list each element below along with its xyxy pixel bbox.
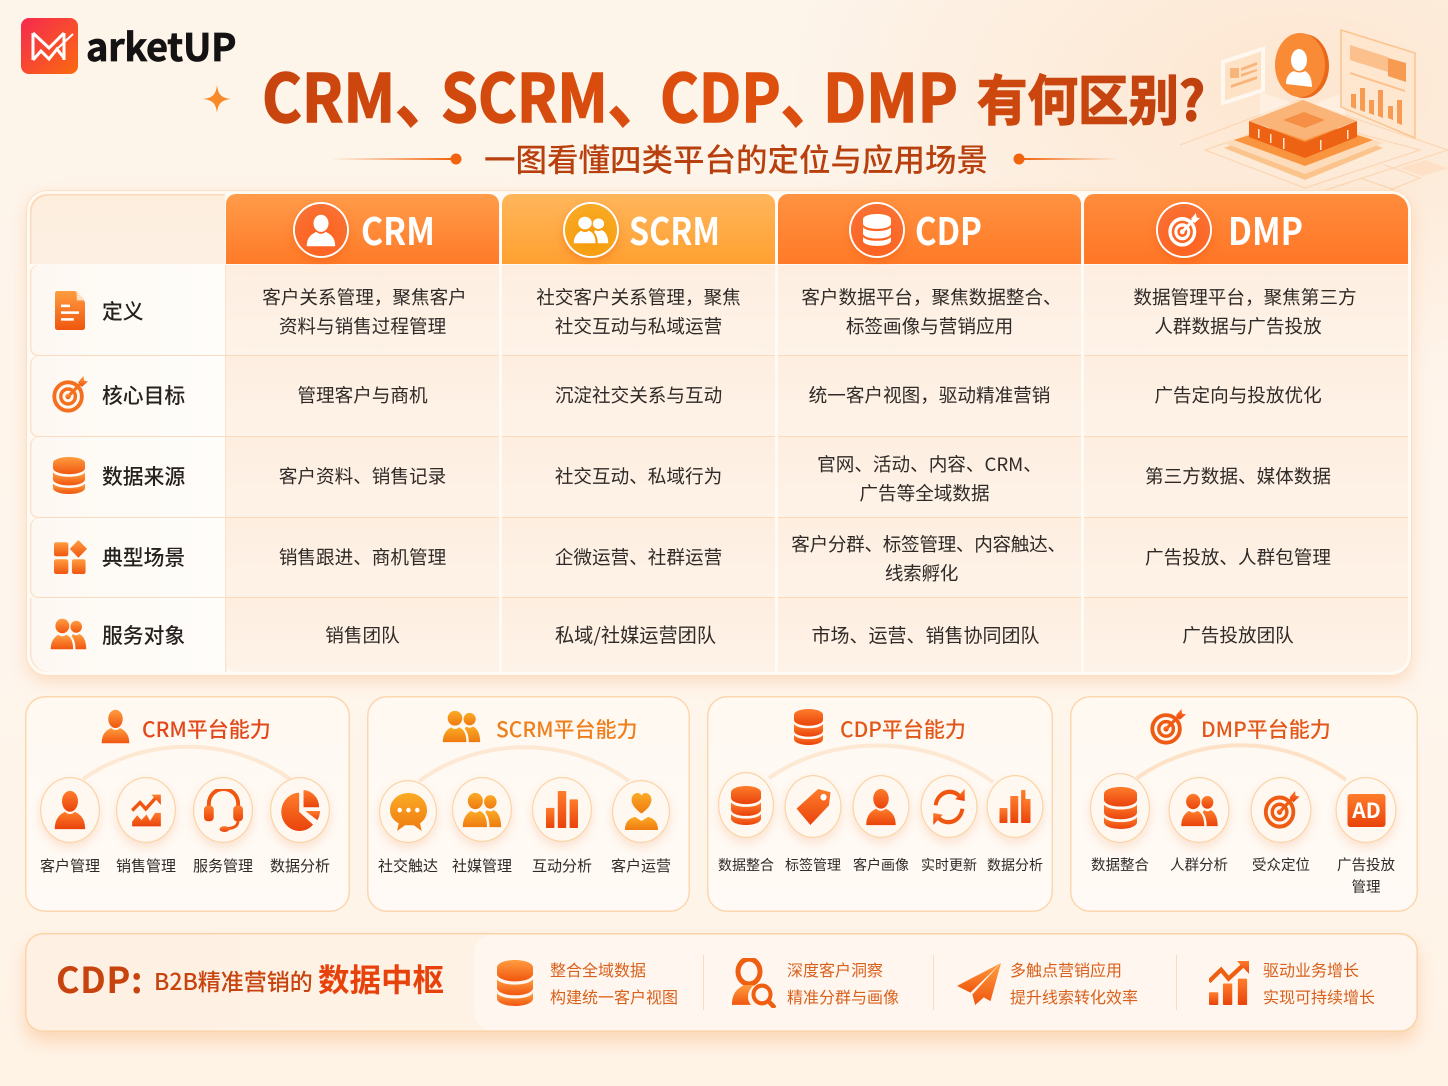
- arc connector: [768, 744, 994, 784]
- banner light zone: [474, 935, 1416, 1030]
- capability: 受众定位: [1241, 770, 1321, 900]
- cell: SCRM 核心目标: 沉淀社交关系与互动: [555, 380, 722, 408]
- capability: 服务管理: 服务管理: [193, 855, 253, 876]
- cell: CRM 核心目标: [226, 356, 499, 437]
- panel: DMP平台能力: [1070, 696, 1418, 912]
- icon: DMP target: [1158, 204, 1210, 256]
- capability: 社交触达: 社交触达: [378, 855, 438, 876]
- capability: 客户管理: 客户管理: [40, 855, 100, 876]
- benefit: 驱动业务增长: [1209, 955, 1389, 1011]
- capability: 数据整合: [1087, 773, 1153, 875]
- cell: DMP 定义: 数据管理平台，聚焦第三方: [1133, 283, 1357, 310]
- benefit: 深度客户洞察: 深度客户洞察: [787, 957, 883, 981]
- cell: CRM 定义: 资料与销售过程管理: [279, 312, 446, 339]
- capability: 人群分析: [1166, 777, 1232, 875]
- benefit: 整合全域数据: [497, 955, 697, 1011]
- benefit: 整合全域数据: 整合全域数据: [550, 957, 646, 981]
- row: 数据来源: [30, 437, 1408, 518]
- glass cylinder: [1260, 92, 1345, 136]
- icon: DMP target: [1150, 709, 1186, 745]
- column header: CRM: [226, 194, 499, 264]
- divider: [703, 955, 704, 1010]
- cell: DMP 定义: 人群数据与广告投放: [1154, 312, 1322, 339]
- capability: 销售管理: 销售管理: [116, 855, 176, 876]
- row label: 核心目标: [30, 356, 225, 437]
- left panel: [1223, 49, 1263, 103]
- column header: CDP: [778, 194, 1081, 264]
- benefit: 驱动业务增长: 驱动业务增长: [1263, 957, 1359, 981]
- benefit: 多触点营销应用: 提升线索转化效率: [1010, 984, 1138, 1008]
- capability: 销售管理: [113, 777, 179, 876]
- table corner cell: [30, 194, 225, 264]
- row: 核心目标: [30, 356, 1408, 437]
- chip: [1249, 121, 1357, 158]
- capability: 标签管理: [782, 775, 844, 875]
- cell: CDP 数据来源: 官网、活动、内容、CRM、: [817, 450, 1042, 476]
- benefit: 深度客户洞察: 精准分群与画像: [787, 984, 899, 1008]
- column header: SCRM: [502, 194, 775, 264]
- column header: DMP: [1084, 194, 1408, 264]
- cell: CDP 数据来源: [778, 437, 1081, 518]
- benefit: 整合全域数据: 构建统一客户视图: [550, 984, 678, 1008]
- cell: CDP 核心目标: [778, 356, 1081, 437]
- capability: 社媒管理: [449, 777, 515, 876]
- cell: SCRM 典型场景: [502, 518, 775, 598]
- cell: CDP 定义: [778, 265, 1081, 356]
- capability: 数据整合: [715, 772, 777, 875]
- CRM label: CRM: [361, 201, 435, 256]
- capability: 广告投放管理: AD: [1351, 794, 1380, 824]
- cell: CRM 定义: [226, 265, 499, 356]
- arc connector: [82, 744, 291, 780]
- capability: 社媒管理: 社媒管理: [452, 855, 512, 876]
- logo: MarketUP: [21, 17, 236, 74]
- capability: 客户画像: [850, 775, 912, 875]
- cell: CDP 服务对象: [778, 598, 1081, 672]
- cell: SCRM 定义: 社交客户关系管理，聚焦: [536, 283, 741, 310]
- capability: 数据分析: 数据分析: [270, 855, 330, 876]
- cell: CRM 服务对象: [226, 598, 499, 672]
- cell: CDP 典型场景: 线索孵化: [885, 558, 958, 586]
- row label: 核心目标: 核心目标: [102, 379, 185, 409]
- heading: CRM平台能力: [142, 714, 271, 744]
- subtitle right rule: [1014, 154, 1116, 164]
- capability: 数据整合: 数据整合: [718, 855, 774, 875]
- capability: 标签管理: 标签管理: [785, 855, 841, 875]
- icon: SCRM people: [442, 710, 480, 742]
- cell: SCRM 定义: 社交互动与私域运营: [555, 312, 722, 339]
- row label: 典型场景: [30, 518, 225, 598]
- title: SCRM、: [441, 46, 667, 142]
- banner headline: B2B精准营销的: [154, 963, 313, 997]
- cell: CDP 典型场景: [778, 518, 1081, 598]
- capability: 广告投放管理: [1326, 770, 1406, 900]
- panel: CRM平台能力: [25, 696, 350, 912]
- cell: CDP 定义: 标签画像与营销应用: [846, 312, 1013, 339]
- icon: SCRM people: [565, 204, 617, 256]
- capability: 数据分析: 数据分析: [987, 855, 1043, 875]
- capability: 客户管理: [37, 777, 103, 876]
- arc connector: [418, 745, 630, 782]
- cell: SCRM 数据来源: [502, 437, 775, 518]
- arc connector: [1136, 743, 1347, 782]
- divider: [1176, 955, 1177, 1010]
- cell: SCRM 数据来源: 社交互动、私域行为: [555, 462, 722, 488]
- cell: SCRM 服务对象: [502, 598, 775, 672]
- cell: CDP 服务对象: 市场、运营、销售协同团队: [811, 620, 1040, 648]
- benefit: 多触点营销应用: [957, 955, 1157, 1011]
- cell: CRM 数据来源: [226, 437, 499, 518]
- cell: CRM 核心目标: 管理客户与商机: [297, 380, 428, 408]
- cell: CRM 服务对象: 销售团队: [325, 620, 400, 648]
- cell: DMP 服务对象: 广告投放团队: [1182, 620, 1294, 648]
- capability: 互动分析: [529, 777, 595, 876]
- icon: CDP database: [794, 709, 823, 745]
- cell: DMP 数据来源: 第三方数据、媒体数据: [1145, 462, 1331, 488]
- cell: CRM 数据来源: 客户资料、销售记录: [279, 462, 446, 488]
- cell: DMP 定义: [1084, 265, 1408, 356]
- subtitle left rule: [335, 154, 462, 164]
- row label: 典型场景: 典型场景: [102, 540, 185, 570]
- avatar coin: [1279, 34, 1329, 98]
- capability: 服务管理: [190, 777, 256, 876]
- cell: SCRM 核心目标: [502, 356, 775, 437]
- panel: CDP平台能力: [707, 696, 1053, 912]
- banner headline: 数据中枢: [318, 955, 444, 1001]
- icon: logo mark: [21, 18, 78, 74]
- cell: CDP 核心目标: 统一客户视图，驱动精准营销: [809, 380, 1050, 408]
- row label: 数据来源: 数据来源: [102, 460, 185, 490]
- icon: CRM person: [102, 710, 130, 744]
- cell: DMP 典型场景: [1084, 518, 1408, 598]
- row label: 定义: 定义: [102, 295, 144, 325]
- benefit: 多触点营销应用: 多触点营销应用: [1010, 957, 1122, 981]
- SCRM label: SCRM: [629, 201, 720, 256]
- row: 服务对象: [30, 598, 1408, 672]
- panel: comparison table: [27, 191, 1411, 675]
- heading: CDP平台能力: [840, 714, 966, 744]
- benefit: 深度客户洞察: [732, 955, 922, 1011]
- banner headline: [56, 951, 448, 1005]
- capability: 广告投放管理: 管理: [1352, 876, 1380, 897]
- wordmark: arketUP: [86, 17, 236, 72]
- cell: DMP 服务对象: [1084, 598, 1408, 672]
- capability: 广告投放管理: 广告投放: [1337, 854, 1395, 875]
- cell: CDP 数据来源: 广告等全域数据: [859, 478, 990, 506]
- title: [262, 46, 1205, 142]
- capability: 客户画像: 客户画像: [853, 855, 909, 875]
- title: CDP、: [660, 46, 840, 142]
- panel: SCRM平台能力: [367, 696, 690, 912]
- cell: SCRM 服务对象: 私域/社媒运营团队: [555, 620, 716, 648]
- cell: CRM 定义: 客户关系管理，聚焦客户: [262, 283, 467, 310]
- title: 有何区别?: [977, 57, 1205, 136]
- right panel: [1341, 30, 1415, 138]
- capability: 受众定位: 受众定位: [1252, 854, 1310, 875]
- CDP label: CDP: [915, 201, 982, 256]
- icon: CRM person: [295, 204, 347, 256]
- row: 典型场景: [30, 518, 1408, 598]
- cell: CDP 定义: 客户数据平台，聚焦数据整合、: [801, 283, 1062, 310]
- heading: DMP平台能力: [1201, 714, 1331, 744]
- capability: 客户运营: [609, 780, 673, 876]
- base plates: [1224, 118, 1383, 180]
- icon: CDP database: [851, 204, 903, 256]
- icon: sparkle: [203, 85, 231, 113]
- capability: 社交触达: [376, 780, 440, 876]
- capability: 实时更新: [918, 775, 980, 875]
- cell: DMP 数据来源: [1084, 437, 1408, 518]
- title: CRM、: [262, 46, 456, 142]
- row label: 服务对象: [30, 598, 225, 672]
- DMP label: DMP: [1228, 201, 1303, 256]
- panel: CDP summary banner: [25, 933, 1418, 1032]
- cell: DMP 典型场景: 广告投放、人群包管理: [1145, 543, 1331, 570]
- hero illustration: isometric data platform: [1180, 29, 1448, 190]
- row label: 服务对象: 服务对象: [102, 619, 185, 649]
- capability: 人群分析: 人群分析: [1170, 854, 1228, 875]
- cell: SCRM 典型场景: 企微运营、社群运营: [555, 543, 722, 570]
- cell: CRM 典型场景: 销售跟进、商机管理: [279, 543, 446, 570]
- cell: DMP 核心目标: 广告定向与投放优化: [1154, 380, 1322, 408]
- cell: CRM 典型场景: [226, 518, 499, 598]
- banner headline: CDP:: [56, 952, 143, 1004]
- subtitle: [335, 135, 1116, 181]
- capability: 互动分析: 互动分析: [532, 855, 592, 876]
- row label: 定义: [30, 265, 225, 356]
- subtitle text: 一图看懂四类平台的定位与应用场景: [484, 135, 988, 181]
- cell: CDP 典型场景: 客户分群、标签管理、内容触达、: [791, 530, 1066, 556]
- row label: 数据来源: [30, 437, 225, 518]
- benefit: 驱动业务增长: 实现可持续增长: [1263, 984, 1375, 1008]
- heading: SCRM平台能力: [496, 714, 638, 744]
- capability: 数据整合: 数据整合: [1091, 854, 1149, 875]
- divider: [933, 955, 934, 1010]
- cell: SCRM 定义: [502, 265, 775, 356]
- row: 定义: [30, 265, 1408, 356]
- title: DMP: [823, 46, 958, 142]
- cell: DMP 核心目标: [1084, 356, 1408, 437]
- capability: 数据分析: [267, 777, 333, 876]
- capability: 实时更新: 实时更新: [921, 855, 977, 875]
- capability: 客户运营: 客户运营: [611, 855, 671, 876]
- capability: 数据分析: [984, 775, 1046, 875]
